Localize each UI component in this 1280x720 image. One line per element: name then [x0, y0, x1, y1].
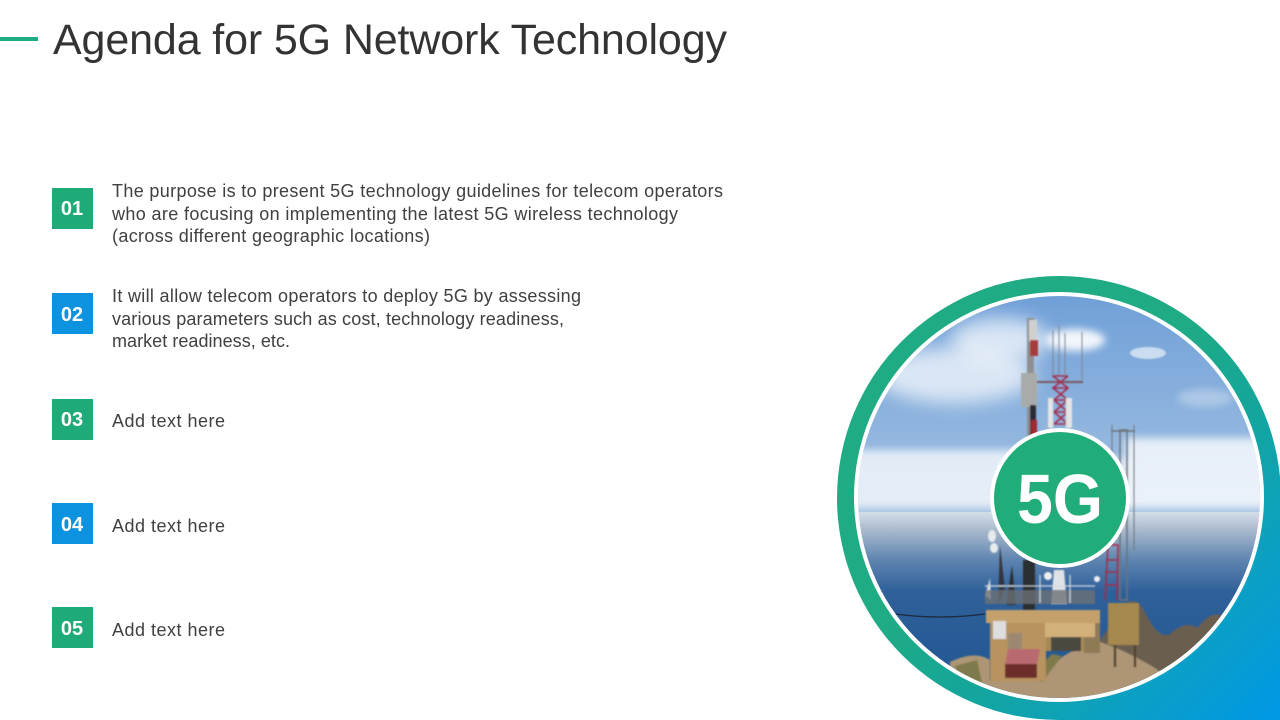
agenda item 03 [52, 399, 225, 440]
agenda item 04 [52, 503, 225, 544]
white ring [854, 292, 1264, 702]
sea [850, 512, 1270, 702]
text block 02 [112, 286, 581, 351]
rocky headland [1100, 601, 1222, 690]
5G badge: 5G [1017, 460, 1103, 538]
number badge 03 [52, 399, 93, 440]
second tower [1037, 325, 1083, 604]
gradient teardrop ring [837, 276, 1280, 720]
text block 02: various parameters such as cost, technology readiness, [112, 309, 564, 329]
title: Agenda for 5G Network Technology [53, 16, 728, 64]
dishes and equipment platform [985, 530, 1100, 605]
third tower [1105, 425, 1135, 600]
text block 01 [111, 181, 723, 246]
text block 02: market readiness, etc. [112, 331, 290, 351]
5G badge [990, 428, 1130, 568]
number badge 03: 03 [61, 409, 83, 431]
text block 02: It will allow telecom operators to deploy 5G by assessing [112, 286, 581, 306]
number badge 04: 04 [61, 514, 84, 536]
sky [850, 290, 1270, 515]
number badge 05: 05 [61, 618, 83, 640]
number badge 02: 02 [61, 304, 83, 326]
text block 04: Add text here [112, 516, 225, 536]
text block 05: Add text here [112, 620, 225, 640]
hill [949, 641, 1160, 698]
main tower [1021, 318, 1038, 610]
number badge 01: 01 [61, 198, 83, 220]
text block 01: who are focusing on implementing the latest 5G wireless technology [111, 204, 678, 224]
text block 01: The purpose is to present 5G technology guidelines for telecom operators [112, 181, 723, 201]
title accent bar [0, 37, 38, 41]
power cable [895, 614, 985, 617]
number badge 01 [52, 188, 93, 229]
building [986, 603, 1139, 681]
text block 01: (across different geographic locations) [112, 226, 430, 246]
agenda item 02 [52, 286, 581, 351]
agenda item 05 [52, 607, 225, 648]
number badge 05 [52, 607, 93, 648]
number badge 04 [52, 503, 93, 544]
clouds [850, 318, 1270, 508]
agenda item 01 [52, 181, 723, 246]
photo: telecom tower by the sea [850, 290, 1270, 702]
text block 03: Add text here [112, 411, 225, 431]
number badge 02 [52, 293, 93, 334]
